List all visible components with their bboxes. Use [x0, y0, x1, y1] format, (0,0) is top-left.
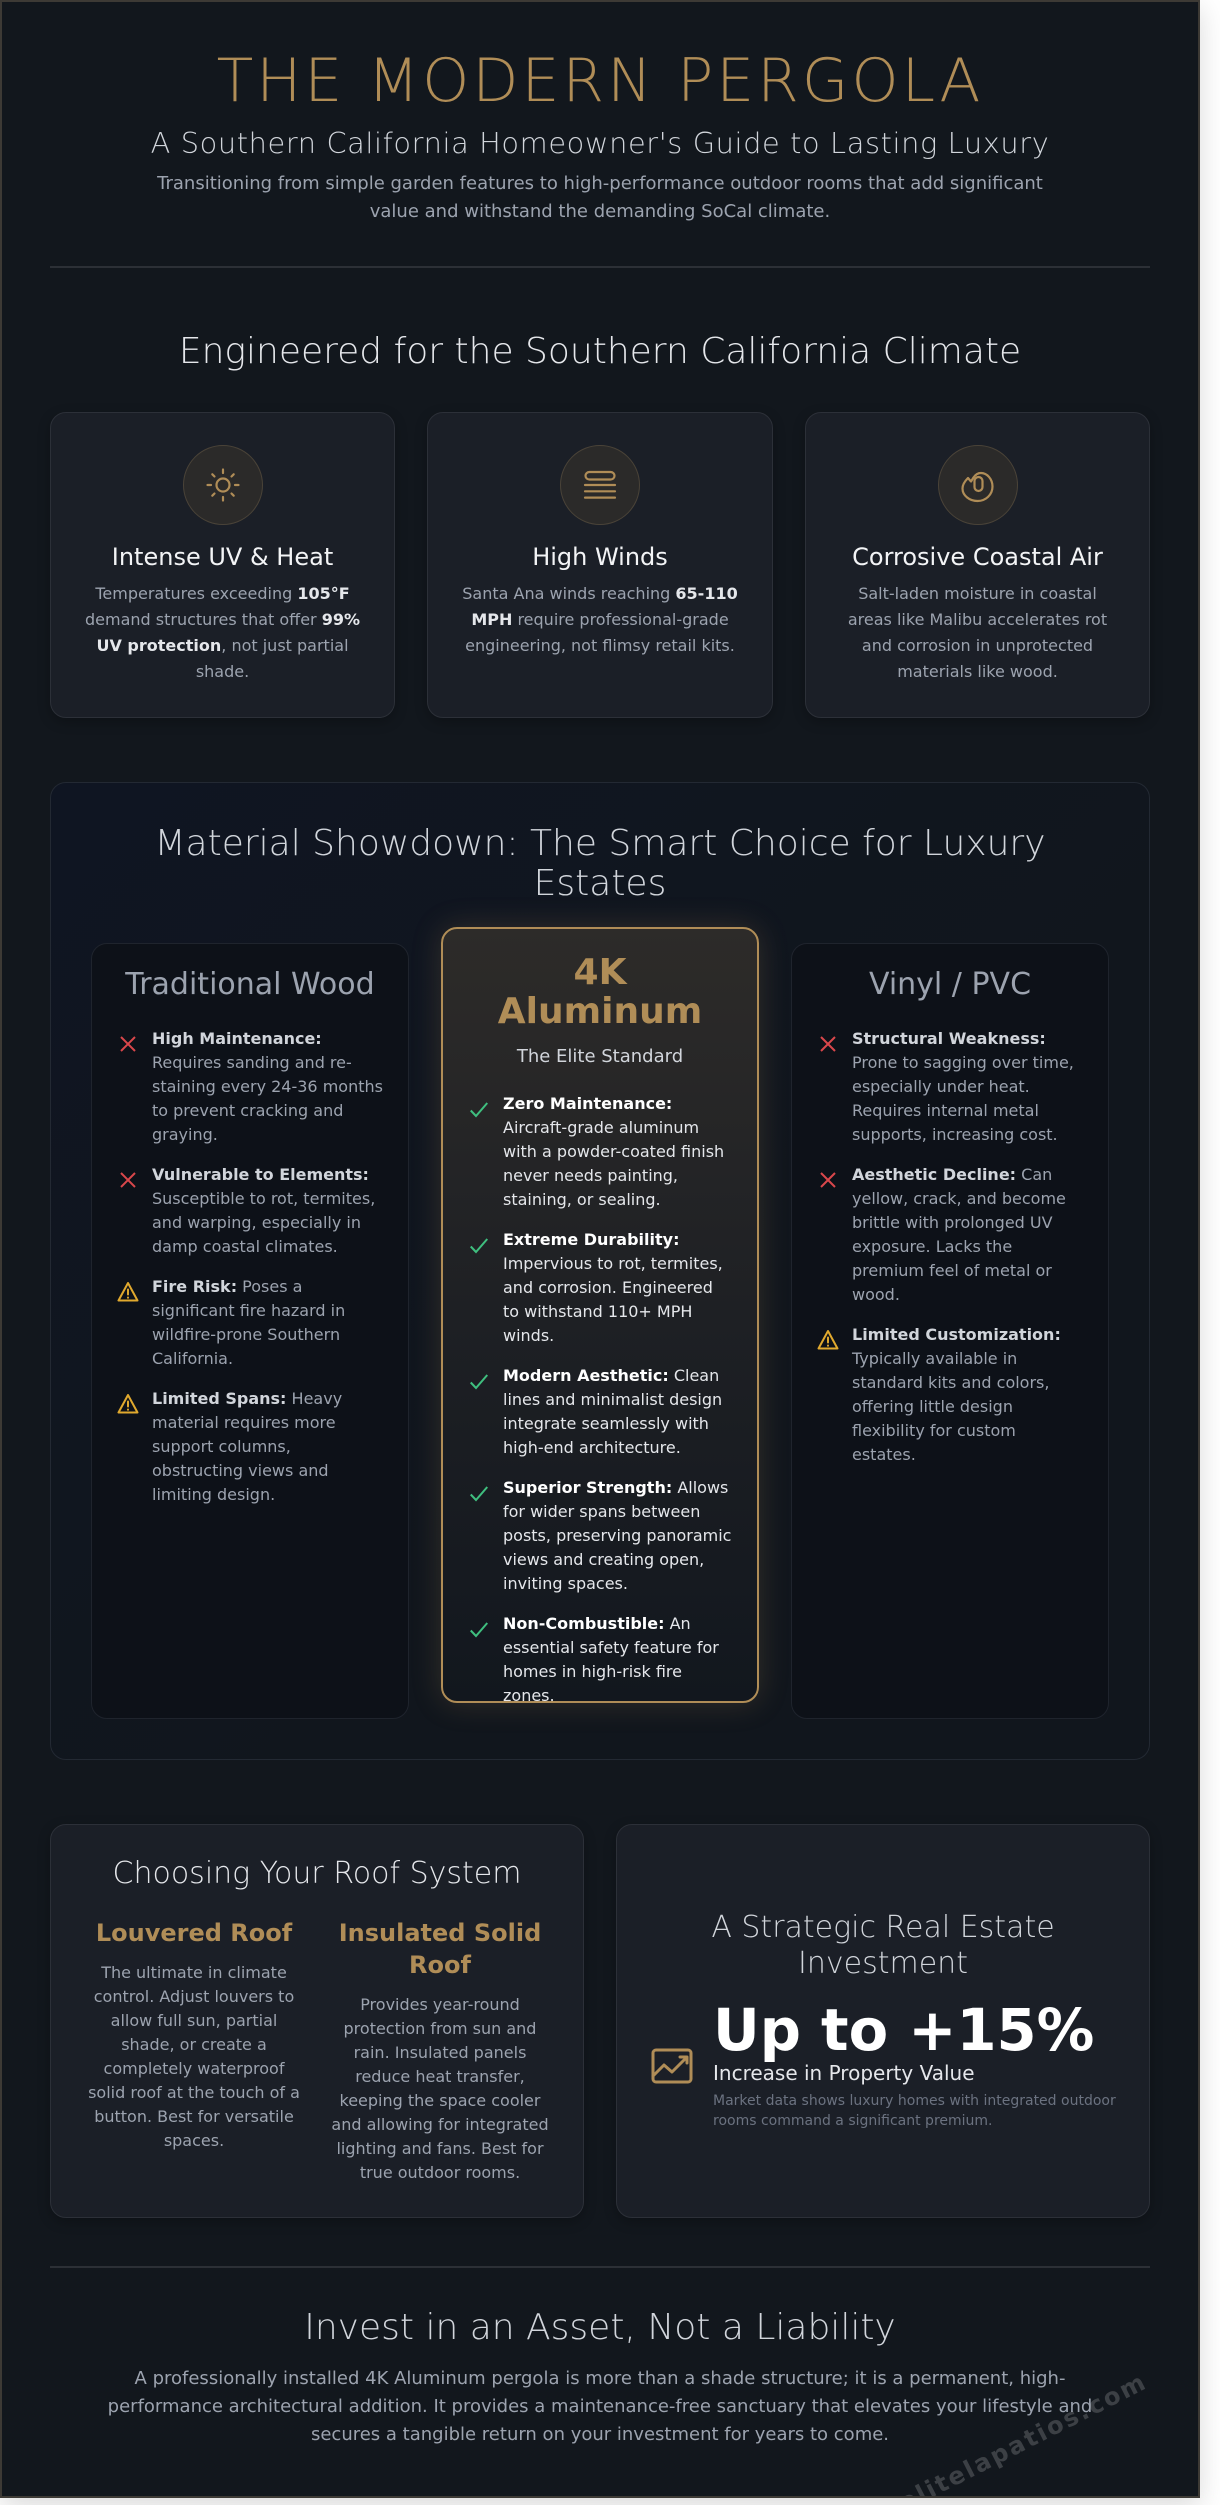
option title [339, 1919, 541, 1979]
card text: demand structures that offer 99% [85, 610, 360, 629]
icon: wind [560, 445, 640, 525]
card text: UV protection, not just partial [96, 636, 349, 655]
item: superior strength: inviting spaces. [503, 1574, 628, 1593]
closing text: secures a tangible return on your investment for years to come. [311, 2424, 889, 2445]
column title: Aluminum [498, 991, 702, 1032]
option text: spaces. [164, 2131, 224, 2150]
option text: reduce heat transfer, [355, 2067, 525, 2086]
item: structural weakness: supports, increasing cost. [852, 1125, 1058, 1144]
item: extreme durability: Extreme Durability: [503, 1230, 679, 1249]
item: vulnerable: Susceptible to rot, termites, [152, 1189, 375, 1208]
card text: materials like wood. [897, 662, 1058, 681]
item: extreme durability: winds. [503, 1326, 554, 1345]
item: modern aesthetic: lines and minimalist design [503, 1390, 722, 1409]
intro text [157, 173, 1043, 222]
panel heading: Investment [798, 1946, 968, 1981]
item: superior strength: Superior Strength: Allows [503, 1478, 728, 1497]
item: limited customization: Limited Customization: [852, 1325, 1061, 1344]
card text: areas like Malibu accelerates rot [848, 610, 1107, 629]
item: high maintenance: staining every 24-36 months [152, 1077, 383, 1096]
card text: and corrosion in unprotected [862, 636, 1093, 655]
item: zero maintenance: never needs painting, [503, 1166, 678, 1185]
item: structural weakness: especially under heat. [852, 1077, 1030, 1096]
item: extreme durability: Impervious to rot, termites, [503, 1254, 723, 1273]
option text: The ultimate in climate [101, 1963, 287, 1982]
item: modern aesthetic: Modern Aesthetic: Clean [503, 1366, 719, 1385]
option text: keeping the space cooler [340, 2091, 540, 2110]
stat note [713, 2093, 1116, 2129]
item: non-combustible [470, 1614, 719, 1705]
item: limited spans: obstructing views and [152, 1461, 329, 1480]
item: limited spans: support columns, [152, 1437, 291, 1456]
item: superior strength [470, 1478, 731, 1593]
item: structural weakness: Prone to sagging over time, [852, 1053, 1074, 1072]
item: limited spans [118, 1389, 342, 1504]
panel heading [711, 1910, 1055, 1981]
option title: Roof [409, 1951, 471, 1979]
section heading [154, 823, 1046, 904]
item: high maintenance: to prevent cracking and [152, 1101, 343, 1120]
item: limited customization: offering little design [852, 1397, 1013, 1416]
column title [498, 952, 702, 1032]
card text: Temperatures exceeding 105°F [95, 584, 350, 603]
panel heading: Choosing Your Roof System [113, 1856, 521, 1891]
item: limited customization: flexibility for custom [852, 1421, 1016, 1440]
item: aesthetic decline: brittle with prolonged UV [852, 1213, 1053, 1232]
item: fire risk [118, 1277, 345, 1368]
item: fire risk: Fire Risk: Poses a [152, 1277, 302, 1296]
card text: shade. [196, 662, 249, 681]
heading: climate: Engineered for the Southern California Climate [179, 331, 1021, 372]
item: zero maintenance: Zero Maintenance: [503, 1094, 672, 1113]
item: non-combustible: essential safety feature for [503, 1638, 719, 1657]
item: aesthetic decline [820, 1165, 1066, 1304]
option text: solid roof at the touch of a [88, 2083, 300, 2102]
option title: Insulated Solid [339, 1919, 541, 1947]
item: zero maintenance: staining, or sealing. [503, 1190, 661, 1209]
item: limited customization: standard kits and colors, [852, 1373, 1049, 1392]
item: vulnerable [120, 1165, 375, 1256]
item: aesthetic decline: wood. [852, 1285, 900, 1304]
panel: coastal air [805, 412, 1150, 718]
panel: high winds [427, 412, 773, 718]
item: limited spans: limiting design. [152, 1485, 275, 1504]
item: modern aesthetic [470, 1366, 722, 1457]
roof option: insulated [331, 1919, 549, 2182]
card title: High Winds [532, 543, 668, 571]
item: limited spans: material requires more [152, 1413, 336, 1432]
card text [848, 584, 1107, 681]
option text [331, 1995, 549, 2182]
option text: Provides year-round [360, 1995, 520, 2014]
card text [462, 584, 738, 655]
item: aesthetic decline: exposure. Lacks the [852, 1237, 1012, 1256]
list: aluminum benefits [470, 1094, 731, 1705]
item: extreme durability [470, 1230, 723, 1345]
item: extreme durability: and corrosion. Engineered [503, 1278, 713, 1297]
item: non-combustible: zones. [503, 1686, 555, 1705]
panel heading: A Strategic Real Estate [711, 1910, 1055, 1945]
item: modern aesthetic: integrate seamlessly with [503, 1414, 709, 1433]
item: vulnerable: damp coastal climates. [152, 1237, 338, 1256]
intro text: value and withstand the demanding SoCal climate. [370, 201, 830, 222]
panel: roof systems [50, 1824, 584, 2218]
option text: shade, or create a [121, 2035, 267, 2054]
item: limited spans: Limited Spans: Heavy [152, 1389, 342, 1408]
list: vinyl drawbacks [818, 1029, 1074, 1464]
option text: allow full sun, partial [111, 2011, 277, 2030]
item: superior strength: for wider spans between [503, 1502, 700, 1521]
icon: chart [651, 2048, 692, 2084]
card title: Corrosive Coastal Air [852, 543, 1103, 571]
item: extreme durability: to withstand 110+ MPH [503, 1302, 692, 1321]
roof option: louvered [88, 1919, 300, 2150]
item: high maintenance: High Maintenance: [152, 1029, 322, 1048]
item: high maintenance [120, 1029, 383, 1144]
column: traditional wood [91, 943, 409, 1719]
item: superior strength: posts, preserving panoramic [503, 1526, 731, 1545]
item: aesthetic decline: premium feel of metal or [852, 1261, 1052, 1280]
stat note: rooms command a significant premium. [713, 2113, 992, 2129]
stat note: Market data shows luxury homes with integrated outdoor [713, 2093, 1116, 2109]
item: high maintenance: graying. [152, 1125, 218, 1144]
item: zero maintenance: Aircraft-grade aluminum [503, 1118, 699, 1137]
stat: up to 15 percent: Up to +15% [713, 1997, 1094, 2064]
option text: control. Adjust louvers to [94, 1987, 294, 2006]
closing text: A professionally installed 4K Aluminum pergola is more than a shade structure; it is a permanent, high- [135, 2368, 1065, 2389]
item: structural weakness: Structural Weakness: [852, 1029, 1046, 1048]
column title: Traditional Wood [125, 967, 375, 1002]
item: fire risk: wildfire-prone Southern [152, 1325, 340, 1344]
option text: completely waterproof [104, 2059, 284, 2078]
item: non-combustible: Non-Combustible: An [503, 1614, 691, 1633]
column title: 4K [574, 952, 626, 993]
card text: Salt-laden moisture in coastal [858, 584, 1097, 603]
closing text [108, 2368, 1092, 2445]
panel: UV and heat [50, 412, 395, 718]
item: high maintenance: Requires sanding and re- [152, 1053, 352, 1072]
card text: MPH require professional-grade [471, 610, 729, 629]
title: THE MODERN PERGOLA [217, 46, 983, 116]
section heading: Estates [534, 863, 666, 904]
item: limited customization [818, 1325, 1061, 1464]
icon: spiral [938, 445, 1018, 525]
panel: material showdown [50, 782, 1150, 1760]
list: wood drawbacks [118, 1029, 383, 1504]
card text: Santa Ana winds reaching 65-110 [462, 584, 738, 603]
option text: lighting and fans. Best for [336, 2139, 544, 2158]
item: structural weakness: Requires internal metal [852, 1101, 1039, 1120]
card title: Intense UV & Heat [112, 543, 333, 571]
column title: Vinyl / PVC [869, 967, 1031, 1002]
icon: sun [183, 445, 263, 525]
panel: real estate investment [616, 1824, 1150, 2218]
option text: protection from sun and [344, 2019, 536, 2038]
item: fire risk: significant fire hazard in [152, 1301, 345, 1320]
item: aesthetic decline: yellow, crack, and become [852, 1189, 1066, 1208]
item: structural weakness [820, 1029, 1074, 1144]
item: zero maintenance [470, 1094, 724, 1209]
section heading: Material Showdown: The Smart Choice for Luxury [154, 823, 1046, 864]
option text: button. Best for versatile [94, 2107, 294, 2126]
column subtitle: The Elite Standard [517, 1046, 683, 1067]
option text [88, 1963, 300, 2150]
stat label: Increase in Property Value [713, 2061, 974, 2085]
item: vulnerable: and warping, especially in [152, 1213, 361, 1232]
item: limited customization: estates. [852, 1445, 916, 1464]
item: fire risk: California. [152, 1349, 233, 1368]
column: vinyl [791, 943, 1109, 1719]
subtitle: A Southern California Homeowner's Guide to Lasting Luxury [151, 126, 1049, 160]
card text [85, 584, 360, 681]
intro text: Transitioning from simple garden features to high-performance outdoor rooms that add significant [157, 173, 1043, 194]
column: 4K aluminum [441, 927, 759, 1703]
item: limited customization: Typically available in [852, 1349, 1017, 1368]
item: vulnerable: Vulnerable to Elements: [152, 1165, 369, 1184]
item: superior strength: views and creating open, [503, 1550, 704, 1569]
option title: Louvered Roof [96, 1919, 292, 1947]
option text: rain. Insulated panels [354, 2043, 526, 2062]
closing text: performance architectural addition. It provides a maintenance-free sanctuary that elevates your lifestyle and [108, 2396, 1092, 2417]
item: aesthetic decline: Aesthetic Decline: Can [852, 1165, 1052, 1184]
item: zero maintenance: with a powder-coated finish [503, 1142, 724, 1161]
option text: true outdoor rooms. [360, 2163, 520, 2182]
closing heading: Invest in an Asset, Not a Liability [304, 2307, 896, 2348]
card text: engineering, not flimsy retail kits. [465, 636, 735, 655]
option text: and allowing for integrated [331, 2115, 549, 2134]
item: modern aesthetic: high-end architecture. [503, 1438, 681, 1457]
item: non-combustible: homes in high-risk fire [503, 1662, 682, 1681]
